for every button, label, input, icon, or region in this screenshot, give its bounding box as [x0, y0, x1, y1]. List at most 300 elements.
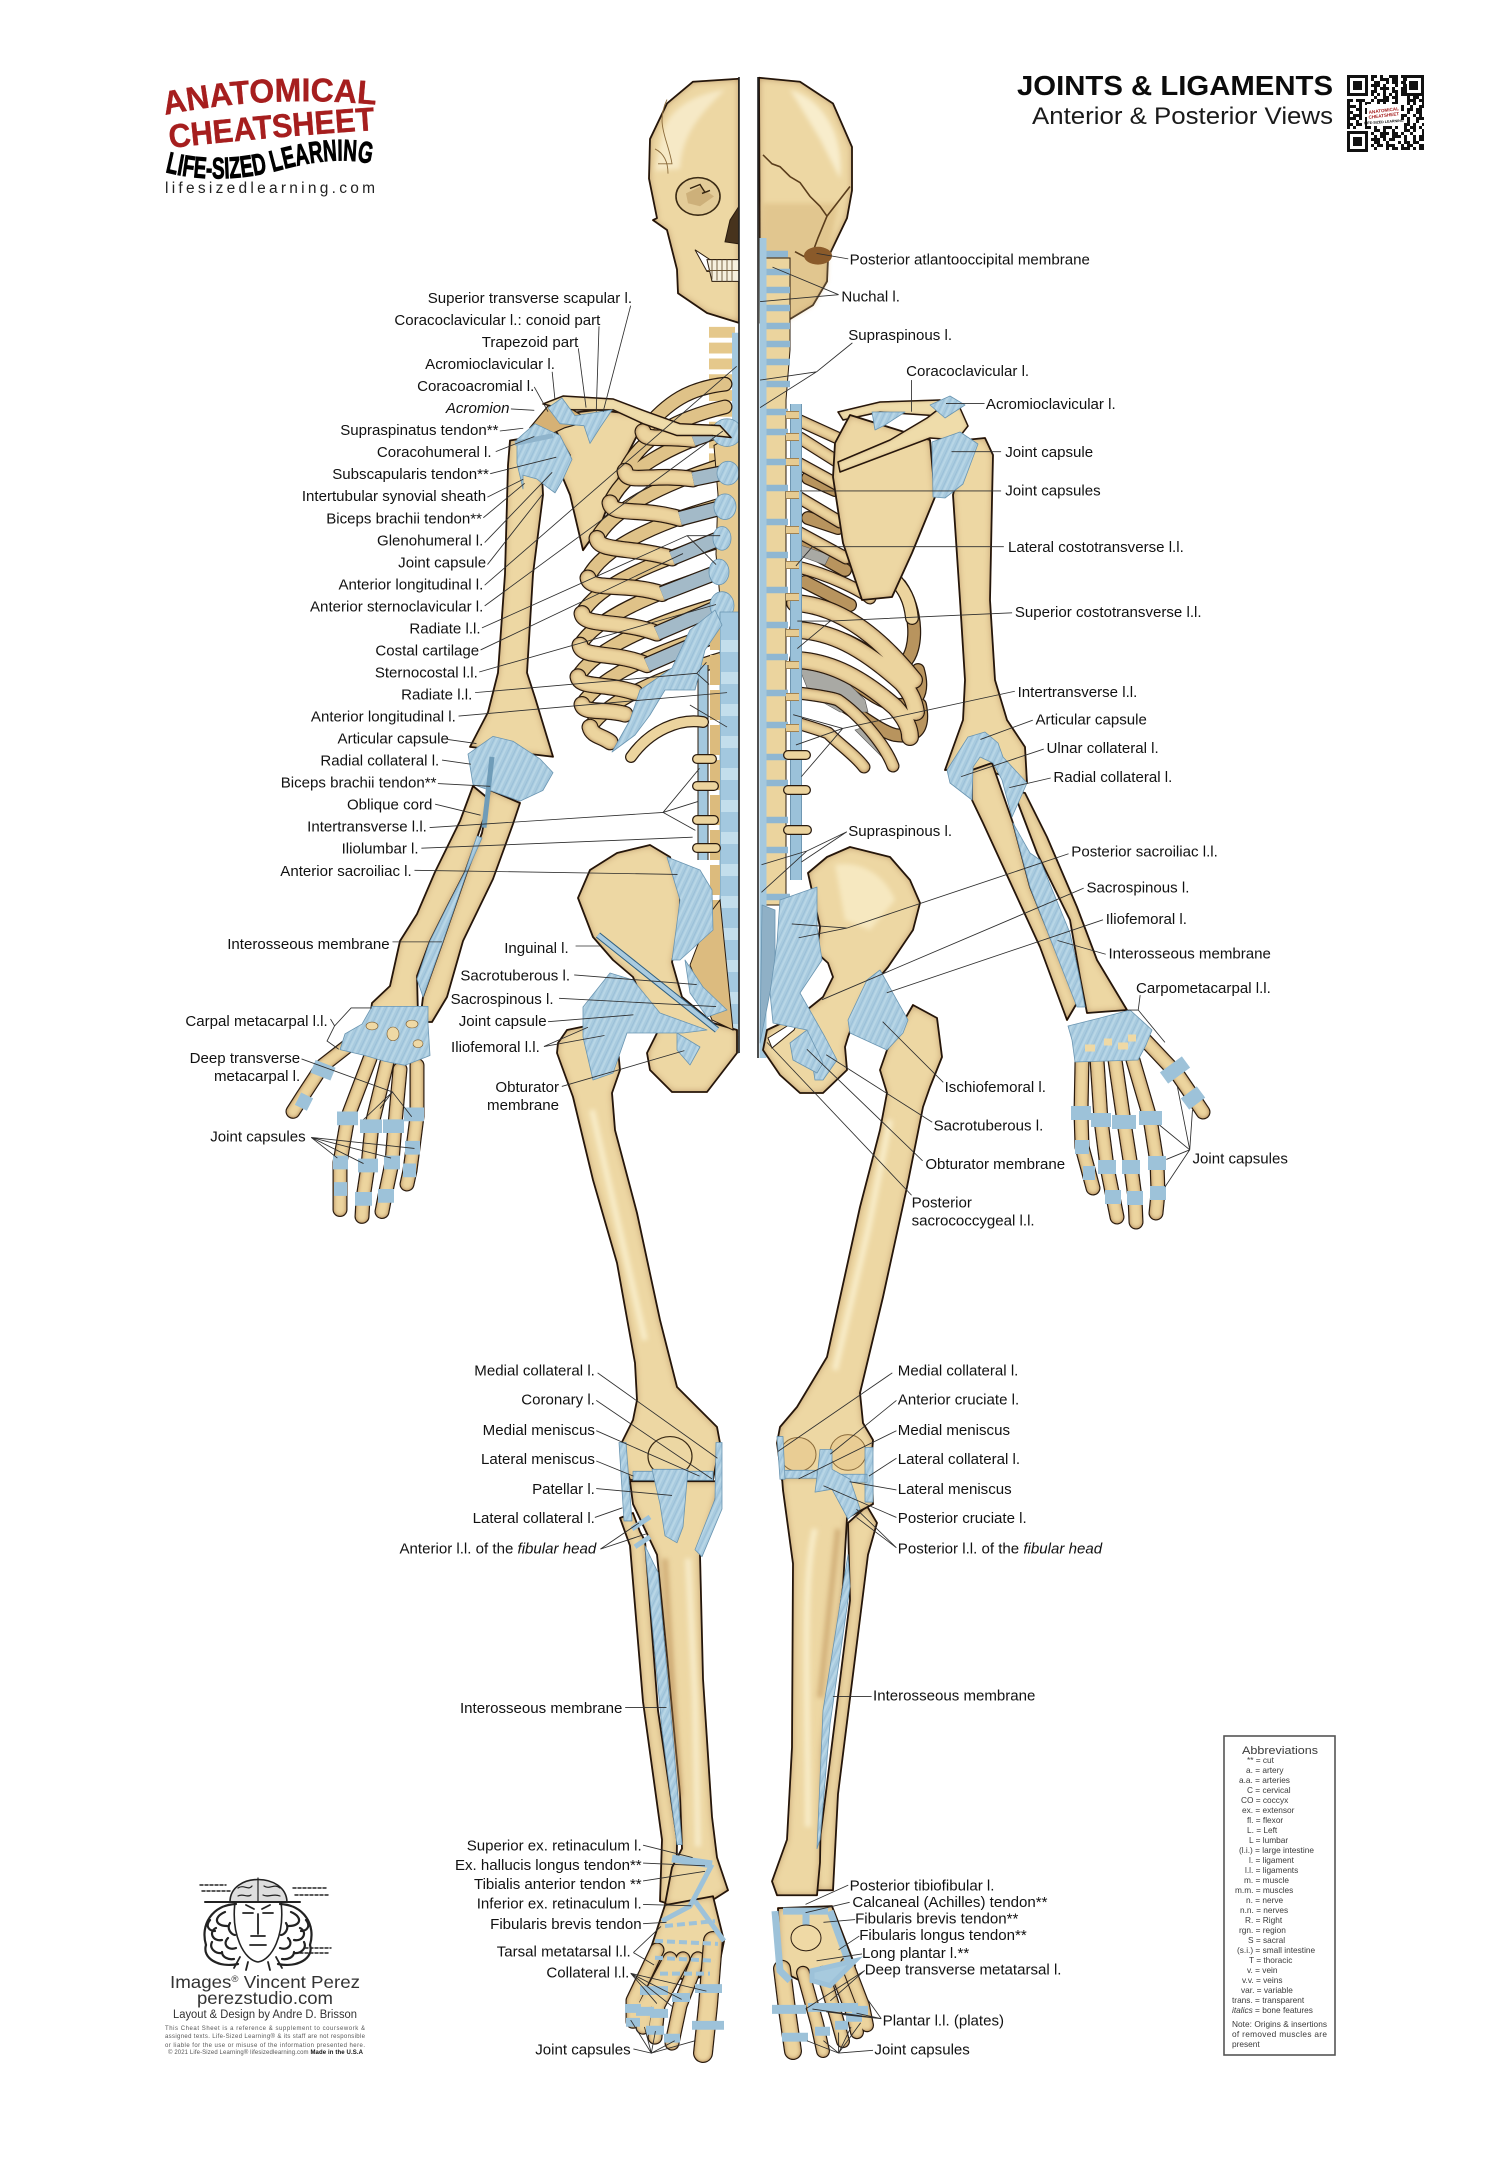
label: Joint capsule hip: [459, 1013, 633, 1030]
label: Anterior cruciate l.: [830, 1392, 1019, 1454]
label: Inguinal l.: Inguinal l.: [504, 940, 569, 957]
label: Deep transverse metacarpal l.: [190, 1050, 412, 1120]
label: Coracoacromial l.: Coracoacromial l.: [417, 378, 534, 395]
label: Ulnar collateral l.: [961, 740, 1159, 777]
label: Intertubular synovial sheath: Intertubular synovial sheath: [302, 488, 486, 505]
credits block: ®: [231, 1974, 239, 1984]
abbreviations list: S = sacral: [1248, 1935, 1285, 1945]
QR code: LIFE-SIZED LEARNING: [1364, 119, 1404, 125]
label: Fibularis longus tendon: [839, 1927, 1027, 1950]
patellar ligament: [652, 1469, 688, 1543]
label: Supraspinous l. neck: Supraspinous l.: [848, 327, 952, 344]
label: Medial meniscus: [483, 1422, 700, 1476]
abbreviations list: v.v. = veins: [1242, 1975, 1282, 1985]
label: Interosseous membrane shin: Interosseous membrane: [460, 1700, 622, 1717]
label: Calcaneal (Achilles) tendon: Calcaneal (Achilles) tendon**: [852, 1894, 1048, 1911]
label: Sacrospinous l.: [451, 991, 716, 1008]
label: Anterior sacroiliac l.: Anterior sacroiliac l.: [280, 863, 412, 880]
label: Posterior cruciate l.: Posterior cruciate l.: [898, 1510, 1027, 1527]
posterior vertebral column and ligaments: [763, 238, 807, 1058]
abbreviations list: ** = cut: [1247, 1755, 1275, 1765]
label: Iliofemoral l.l.: Iliofemoral l.l.: [451, 1039, 540, 1056]
posterior upper ribs: [798, 420, 870, 598]
label: Articular capsule right: [980, 711, 1147, 739]
label: Carpal metacarpal l.l.: [185, 1008, 372, 1049]
label: Biceps brachii tendon: [326, 483, 525, 527]
label: Radial collateral l. right: [1009, 769, 1172, 788]
left scapula: [556, 410, 640, 552]
label: Posterior sacrococcygeal l.l.: Posterior: [912, 1195, 972, 1212]
left tibia: [630, 1481, 728, 1908]
abbreviations list: m. = muscle: [1244, 1875, 1289, 1885]
abbreviations list: R. = Right: [1245, 1915, 1283, 1925]
abbreviations list: l. = ligament: [1249, 1855, 1295, 1865]
label: Joint capsules right foot: Joint capsules: [874, 2041, 970, 2058]
abbreviations list: m.m. = muscles: [1235, 1885, 1293, 1895]
label: Superior costotransverse l.l.: Superior costotransverse l.l.: [1015, 604, 1202, 621]
label: Interosseous membrane right forearm: Interosseous membrane: [1108, 945, 1271, 962]
label: Fibularis brevis tendon right: Fibularis brevis tendon**: [855, 1911, 1019, 1928]
abbreviations note: [1232, 2019, 1327, 2049]
label: Lateral costotransverse l.l.: [796, 539, 1184, 566]
label: Intertransverse l.l. right: [793, 684, 1137, 777]
abbreviations list: italics = bone features: [1232, 2005, 1313, 2015]
left hip bone: [578, 845, 737, 1092]
label: Sacrospinous l.: Sacrospinous l.: [451, 991, 554, 1008]
sternum: [714, 432, 739, 619]
label: Superior costotransverse l.l.: [797, 604, 1202, 649]
ankle retinacula and foot ligaments: [625, 1858, 724, 2038]
label: Oblique cord: [347, 797, 481, 815]
label: Lateral collateral l. right: [869, 1451, 1020, 1476]
posterior skull: [759, 78, 852, 323]
label: Sacrotuberous l. right: Sacrotuberous l.: [934, 1118, 1043, 1135]
right lower leg: [772, 1435, 877, 2051]
label: Deep transverse metatarsal l.: [806, 1962, 1061, 2009]
left ulna: [420, 790, 520, 1022]
anterior ribs: [578, 432, 693, 742]
label: Joint capsules right hand: Joint capsules: [1192, 1151, 1288, 1168]
abbreviations list: L. = Left: [1247, 1825, 1278, 1835]
posterior sacroiliac and sacrotuberous ligaments: [770, 887, 837, 1080]
label: Joint capsules left foot: [535, 2020, 695, 2058]
label: Fibularis longus tendon: Fibularis longus tendon**: [859, 1927, 1027, 1944]
label: Obturator membrane: Obturator: [495, 1079, 559, 1096]
label: Medial meniscus right: Medial meniscus: [898, 1422, 1010, 1439]
label: Trapezoid part: Trapezoid part: [482, 334, 579, 351]
abbreviations list: CO = coccyx: [1241, 1795, 1289, 1805]
sternocostal ligament nodes: [709, 419, 742, 619]
label: Sacrotuberous l. right: [826, 1055, 1043, 1135]
label: Medial collateral l. knee: Medial collateral l.: [474, 1363, 595, 1380]
label: Lateral meniscus right: Lateral meniscus: [898, 1481, 1012, 1498]
label: Lateral meniscus: [481, 1451, 633, 1476]
label: Joint capsules right foot: [807, 2023, 970, 2058]
left clavicle: [543, 396, 731, 438]
label: Acromioclavicular l. right: Acromioclavicular l.: [986, 396, 1116, 413]
label: Medial collateral l. right: Medial collateral l.: [898, 1363, 1018, 1380]
label: Plantar l.l. (plates): [812, 1999, 1004, 2030]
posterior lateral rib: [892, 576, 912, 618]
central divider lines: [739, 77, 758, 1058]
label: Lateral costotransverse l.l.: Lateral costotransverse l.l.: [1008, 539, 1184, 556]
label: Obturator membrane right: Obturator membrane: [925, 1156, 1065, 1173]
label: Joint capsules right hand: [1159, 1086, 1288, 1187]
abbreviations list: T = thoracic: [1249, 1955, 1292, 1965]
label: Lateral collateral l. right: Lateral collateral l.: [898, 1451, 1020, 1468]
label: Anterior l.l. of the fibular head: Anterior l.l. of the fibular head: [399, 1540, 597, 1557]
label: Plantar l.l. (plates): Plantar l.l. (plates): [883, 2013, 1004, 2030]
anterior skeleton (left half): [470, 79, 742, 757]
calcaneus: [791, 1925, 821, 1951]
abbreviations heading: Abbreviations: [1242, 1745, 1319, 1757]
artist portrait sketch: [200, 1878, 331, 1970]
logo: anatomical cheatsheet life-sized learning: lifesizedlearning.com: [165, 180, 375, 197]
credits block: [165, 1972, 366, 2056]
credits block: or liable for the use or misuse of the information presented here.: [165, 2043, 365, 2049]
label: Iliofemoral l. right: [887, 911, 1187, 993]
label: Interosseous membrane forearm: Interosseous membrane: [227, 936, 390, 953]
label: Medial meniscus right: [799, 1422, 1010, 1479]
posterior long ribs: [795, 603, 916, 737]
label: Superior transverse scapular l.: [428, 290, 632, 412]
label: Intertubular synovial sheath: [302, 479, 523, 505]
costal cartilages: [647, 432, 725, 665]
title: [1017, 70, 1333, 130]
label: Supraspinous l. neck: [760, 327, 952, 408]
label: Biceps brachii tendon forearm: Biceps brachii tendon**: [281, 775, 437, 792]
sacrospinous ligament: [685, 960, 727, 1017]
left lower leg: [619, 1437, 728, 2053]
left elbow and hand: [293, 736, 553, 1217]
forearm interosseous membrane right: [1013, 823, 1085, 1007]
label: Costal cartilage: [375, 554, 683, 659]
left toes: [633, 1941, 713, 2053]
label: Posterior sacrococcygeal l.l.: sacrococcygeal l.l.: [912, 1213, 1035, 1230]
label: Deep transverse metacarpal l.: Deep transverse: [190, 1050, 300, 1067]
acromion and coracoid: [529, 406, 582, 433]
abbreviations list: var. = variable: [1241, 1985, 1293, 1995]
label: Carpometacarpal l.l.: [1128, 980, 1271, 1042]
abbreviations list: l.l. = ligaments: [1245, 1865, 1298, 1875]
left elbow capsule: [468, 736, 553, 801]
lower leg interosseous membrane: [645, 1546, 682, 1845]
right cruciate ligaments: [815, 1449, 860, 1519]
abbreviations note: Note: Origins & insertions: [1232, 2019, 1327, 2029]
title: Anterior & Posterior Views: [1032, 103, 1333, 130]
abbreviations list: fl. = flexor: [1247, 1815, 1283, 1825]
right femur: [777, 1005, 942, 1480]
logo: anatomical cheatsheet life-sized learning: CHEATSHEET: [170, 107, 374, 148]
abbreviations list: ex. = extensor: [1242, 1805, 1295, 1815]
anterior skull and cervical spine: [649, 79, 739, 475]
label: Collateral l.l.: [546, 1964, 706, 2006]
lateral collateral ligament: [619, 1443, 632, 1521]
right tibia: [772, 1477, 873, 1895]
left fibula: [620, 1513, 677, 1906]
label: Ischiofemoral l.: Ischiofemoral l.: [945, 1079, 1046, 1096]
left foot tarsals: [650, 1896, 724, 1981]
credits block: assigned texts. Life-Sized Learning® & its staff are not responsible: [165, 2033, 366, 2040]
label: Nuchal l.: Nuchal l.: [841, 289, 900, 306]
abbreviations list: trans. = transparent: [1232, 1995, 1305, 2005]
label: Posterior sacroiliac l.l.: Posterior sacroiliac l.l.: [1071, 843, 1218, 860]
left radius: [370, 786, 490, 1017]
scapular spine and acromion: [838, 408, 968, 472]
label: Sacrospinous l. right: [822, 879, 1189, 1000]
right ankle and plantar ligaments: [772, 1911, 868, 2037]
label: Costal cartilage: Costal cartilage: [375, 642, 479, 659]
label: Superior ex. retinaculum l.: [467, 1838, 693, 1858]
abbreviations list: n.n. = nerves: [1240, 1905, 1288, 1915]
label: Tibialis anterior tendon: Tibialis anterior tendon **: [474, 1876, 642, 1893]
floating ribs: [797, 693, 893, 767]
right scapula: [833, 415, 935, 600]
label: Joint capsules spine: Joint capsules: [1005, 483, 1101, 500]
label: Joint capsules left hand: [210, 1129, 414, 1164]
right radius: [1013, 790, 1127, 1013]
label: Anterior sternoclavicular l.: Anterior sternoclavicular l.: [310, 598, 483, 615]
left knee patella: [648, 1437, 692, 1476]
obturator membrane: [677, 1033, 700, 1065]
credits block: © 2021 Life-Sized Learning® lifesizedlearning.com Made in the U.S.A: [168, 2049, 364, 2056]
anterior pelvis and left femur: [557, 845, 737, 1480]
right shoulder capsule: [932, 432, 978, 498]
label: Anterior longitudinal l.: Anterior longitudinal l.: [338, 576, 483, 593]
label: Supraspinous l. lumbar: Supraspinous l.: [848, 823, 952, 840]
label: Glenohumeral l.: Glenohumeral l.: [377, 532, 483, 549]
abbreviations list: n. = nerve: [1246, 1895, 1284, 1905]
right hand bones: [1081, 1040, 1203, 1222]
label: Tarsal metatarsal l.l.: [497, 1926, 661, 1965]
label: Posterior sacrococcygeal l.l.: [767, 1042, 1035, 1230]
left hand joint capsules: [298, 1066, 424, 1199]
logo: anatomical cheatsheet life-sized learning: LIFE-SIZED LEARNING: [166, 139, 373, 180]
anterior longitudinal ligament strip and vertebrae: [612, 610, 739, 1053]
right wrist ligaments: [1068, 1010, 1152, 1062]
label: Superior transverse scapular l.: Superior transverse scapular l.: [428, 290, 632, 307]
label: Obturator membrane: [487, 1051, 684, 1114]
label: Coronary l.: Coronary l.: [521, 1392, 595, 1409]
anterior rib cage, scapula, clavicle and shoulder: [470, 384, 742, 757]
anterior tibiofibular ligaments: [632, 1517, 650, 1547]
label: Ischiofemoral l.: [883, 1022, 1046, 1096]
forearm interosseous membrane: [417, 836, 482, 997]
right humerus: [945, 438, 1027, 783]
label: Trapezoid part: [482, 334, 586, 408]
label: Acromioclavicular l.: Acromioclavicular l.: [425, 356, 555, 373]
label: Sacrotuberous l.: [460, 967, 697, 985]
poster: joints and ligaments anatomical cheat sheet: [165, 75, 1424, 2063]
label: Sacrotuberous l.: Sacrotuberous l.: [460, 967, 570, 984]
right elbow capsule: [947, 732, 1027, 817]
hip joint capsule: [583, 973, 707, 1080]
label: Joint capsule: Joint capsule: [398, 554, 486, 571]
label: Inferior ex. retinaculum l.: Inferior ex. retinaculum l.: [477, 1896, 642, 1913]
label: Interosseous membrane right forearm: [1058, 940, 1271, 962]
medial collateral ligament: [695, 1443, 722, 1557]
left femur: [557, 1020, 720, 1480]
label: Coracohumeral l.: Coracohumeral l.: [377, 444, 492, 461]
label: Posterior atlantooccipital membrane: Posterior atlantooccipital membrane: [850, 251, 1090, 268]
label: Joint capsules left hand: Joint capsules: [210, 1129, 306, 1146]
label: Anterior l.l. of the fibular head: [399, 1523, 646, 1557]
label: Joint capsule right shoulder: Joint capsule: [1005, 444, 1093, 461]
right fibula: [817, 1506, 877, 1890]
label: Iliolumbar l.: Iliolumbar l.: [342, 841, 419, 858]
label: Carpal metacarpal l.l.: Carpal metacarpal l.l.: [185, 1013, 328, 1030]
left knee meniscus: [633, 1471, 713, 1480]
abbreviations list: a. = artery: [1246, 1765, 1284, 1775]
label: Supraspinatus tendon: Supraspinatus tendon**: [340, 422, 499, 439]
inguinal ligament: [598, 935, 717, 1030]
label: Radiate l.l. lower: Radiate l.l.: [401, 687, 472, 704]
label: Radial collateral l. right: Radial collateral l.: [1053, 769, 1172, 786]
label: Supraspinous l. lumbar: [761, 823, 952, 892]
label: Joint capsules left foot: Joint capsules: [535, 2041, 631, 2058]
title: JOINTS & LIGAMENTS: [1017, 70, 1333, 101]
credits block: Vincent Perez: [239, 1972, 360, 1992]
label: Intertransverse l.l. right: Intertransverse l.l.: [1018, 684, 1137, 701]
label: Articular capsule: Articular capsule: [338, 731, 449, 748]
right knee meniscus: [782, 1447, 873, 1502]
label: Lateral collateral l.: Lateral collateral l.: [473, 1510, 595, 1527]
anatomical labels and leader lines: [185, 251, 1288, 2058]
label: Posterior tibiofibular l.: [806, 1878, 994, 1904]
label: Carpometacarpal l.l.: Carpometacarpal l.l.: [1136, 980, 1271, 997]
left forearm bones: [370, 786, 520, 1022]
label: Subscapularis tendon: [332, 457, 556, 483]
label: Radiate l.l.: [409, 536, 720, 637]
right toes: [782, 1964, 867, 2051]
biceps tendon stump: [515, 436, 553, 443]
abbreviations list: L = lumbar: [1249, 1835, 1288, 1845]
right clavicle: [838, 400, 953, 420]
left hand bones: [293, 1039, 417, 1217]
label: Intertransverse l.l.: [307, 768, 700, 836]
floating rib: [631, 721, 703, 757]
abbreviations list: C = cervical: [1247, 1785, 1291, 1795]
right hand joint capsules: [1071, 1062, 1201, 1198]
label: Acromioclavicular l.: [425, 356, 555, 399]
label: Anterior cruciate l.: Anterior cruciate l.: [898, 1392, 1019, 1409]
credits block: perezstudio.com: [197, 1988, 333, 2008]
label: Coronary l.: [521, 1392, 712, 1479]
label: Posterior cruciate l.: [823, 1486, 1027, 1527]
credits block: Layout & Design by Andre D. Brisson: [173, 2009, 357, 2021]
label: Radial collateral l.: Radial collateral l.: [320, 753, 439, 770]
label: Coracoclavicular l.: [906, 363, 1029, 412]
label: Coracoacromial l.: [417, 378, 548, 412]
abbreviations note: present: [1232, 2039, 1260, 2049]
lower costal cartilage fan: [612, 610, 722, 752]
label: Lateral meniscus: Lateral meniscus: [481, 1451, 595, 1468]
abbreviations list: v. = vein: [1247, 1965, 1278, 1975]
label: Posterior sacroiliac l.l.: [792, 843, 1218, 938]
label: Iliofemoral l. right: Iliofemoral l.: [1106, 911, 1187, 928]
label: Acromion: Acromion: [445, 400, 509, 417]
label: Sacrospinous l. right: Sacrospinous l.: [1086, 879, 1189, 896]
label: Coracoclavicular l.: Coracoclavicular l.: [906, 363, 1029, 380]
logo: anatomical cheatsheet life-sized learning: [165, 78, 376, 197]
sacrum: [690, 900, 733, 1030]
left carpal ligaments: [340, 1006, 430, 1065]
label: Fibularis brevis tendon: Fibularis brevis tendon: [490, 1916, 642, 1933]
pleura grey patches: [802, 546, 882, 758]
label: Sternocostal l.l.: [375, 605, 716, 681]
label: Anterior sacroiliac l.: [280, 863, 677, 880]
label: Subscapularis tendon: Subscapularis tendon**: [332, 466, 489, 483]
label: Deep transverse metatarsal l.: Deep transverse metatarsal l.: [865, 1962, 1061, 1979]
label: Tibialis anterior tendon: [474, 1871, 705, 1893]
label: Ulnar collateral l.: Ulnar collateral l.: [1047, 740, 1159, 757]
label: Obturator membrane: membrane: [487, 1097, 559, 1114]
right knee condyles: [780, 1435, 866, 1471]
label: Anterior longitudinal l.: [338, 366, 737, 593]
posterior pelvis: [760, 847, 942, 1480]
acromioclavicular and coracoclavicular ligaments: [548, 398, 612, 443]
label: Glenohumeral l.: [377, 472, 552, 549]
label: Nuchal l.: [760, 267, 900, 306]
abbreviations list: [1232, 1755, 1316, 2015]
abbreviations list: rgn. = region: [1239, 1925, 1286, 1935]
posterior ribs return arcs: [800, 478, 921, 736]
lower leg interosseous membrane right: [817, 1555, 850, 1849]
label: Intertransverse l.l.: Intertransverse l.l.: [307, 819, 427, 836]
QR code: [1347, 75, 1424, 152]
label: Deep transverse metacarpal l.: metacarpal l.: [214, 1068, 300, 1085]
label: Long plantar l.: Long plantar l.**: [862, 1945, 969, 1962]
label: Medial collateral l. knee: [474, 1363, 717, 1458]
QR code: ANATOMICAL: [1368, 106, 1399, 115]
credits block: This Cheat Sheet is a reference & supplement to coursework &: [165, 2026, 365, 2032]
label: Posterior l.l. of the fibular head: [856, 1509, 1103, 1557]
QR code: CHEATSHEET: [1368, 111, 1400, 120]
label: Patellar l.: Patellar l.: [532, 1481, 595, 1498]
sacral ligament strip: [760, 905, 775, 1043]
credits block: Images: [170, 1972, 227, 1992]
label: Joint capsule hip: Joint capsule: [459, 1013, 547, 1030]
label: Radiate l.l. lower: [401, 662, 709, 704]
label: Radiate l.l.: Radiate l.l.: [409, 620, 481, 637]
left humerus: [470, 436, 553, 757]
label: Articular capsule right: Articular capsule: [1036, 711, 1147, 728]
label: Ex. hallucis longus tendon: Ex. hallucis longus tendon**: [455, 1857, 642, 1874]
label: Oblique cord: Oblique cord: [347, 797, 432, 814]
label: Sternocostal l.l.: Sternocostal l.l.: [375, 664, 478, 681]
abbreviations box: [1224, 1736, 1335, 2055]
abbreviations list: a.a. = arteries: [1239, 1775, 1290, 1785]
label: Joint capsule: [398, 494, 543, 571]
label: Inguinal l.: [504, 940, 600, 957]
label: Posterior tibiofibular l.: Posterior tibiofibular l.: [850, 1878, 994, 1895]
right foot: [778, 1906, 855, 1981]
ischial ligament patch: [790, 1030, 823, 1073]
label: Interosseous membrane right shin: Interosseous membrane: [873, 1688, 1035, 1705]
right hip bone: [763, 847, 920, 1093]
label: Medial meniscus: Medial meniscus: [483, 1422, 595, 1439]
anterior sacroiliac ligament: [667, 857, 713, 960]
label: Medial collateral l. right: [778, 1363, 1018, 1451]
right ulna: [972, 763, 1077, 1020]
abbreviations note: of removed muscles are: [1232, 2029, 1327, 2039]
label: Collateral l.l.: Collateral l.l.: [546, 1964, 629, 1981]
label: Coracohumeral l.: [377, 437, 534, 461]
label: Anterior longitudinal l. lower: [311, 693, 727, 727]
label: Biceps brachii tendon: Biceps brachii tendon**: [326, 510, 482, 527]
posterior hip capsule: [848, 970, 908, 1050]
posterior skeleton (right half): [759, 78, 1203, 2051]
